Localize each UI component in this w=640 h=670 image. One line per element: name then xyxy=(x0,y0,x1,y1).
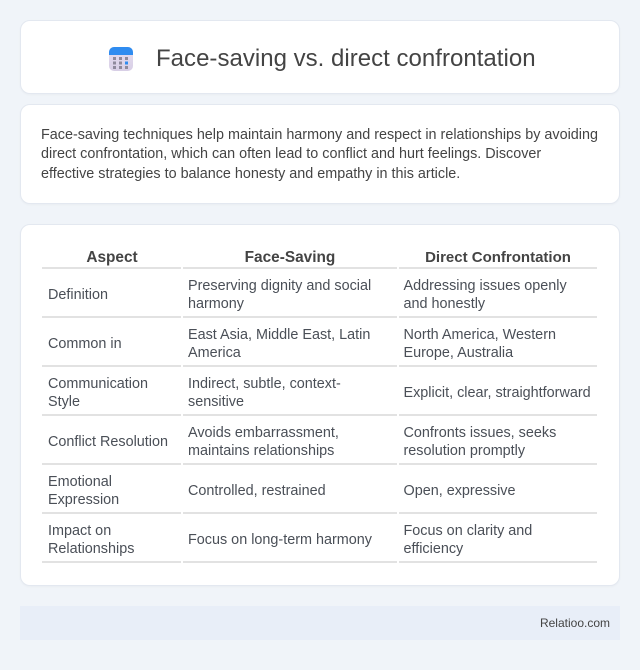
row: Impact on Relationships xyxy=(48,523,532,557)
row: Emotional Expression: Emotional xyxy=(48,474,112,490)
row: Common in: Common in xyxy=(48,336,122,352)
row: Communication Style: Communication xyxy=(48,376,148,392)
row: Definition: harmony xyxy=(188,296,244,312)
row: Emotional Expression: Expression xyxy=(48,492,119,508)
row: Common in: America xyxy=(188,345,241,361)
row: Conflict Resolution: resolution promptly xyxy=(404,443,525,459)
row: Common in xyxy=(48,327,556,361)
row: Common in: Europe, Australia xyxy=(404,345,513,361)
row: Common in: East Asia, Middle East, Latin xyxy=(188,327,370,343)
row: Communication Style xyxy=(48,376,591,410)
panel: title card xyxy=(20,20,620,94)
row: Conflict Resolution: Conflict Resolution xyxy=(48,434,168,450)
row: Definition xyxy=(48,278,567,312)
row: Impact on Relationships: Focus on clarity and xyxy=(404,523,532,539)
row: Definition: Preserving dignity and social xyxy=(188,278,371,294)
row: Definition: Definition xyxy=(48,287,108,303)
row: Emotional Expression xyxy=(48,474,515,508)
intro text xyxy=(41,126,598,182)
row: Impact on Relationships: Impact on xyxy=(48,523,111,539)
row: Emotional Expression: Open, expressive xyxy=(404,483,515,499)
header: Face-Saving: Face-Saving xyxy=(245,249,335,266)
intro text: direct confrontation, which can often lead to conflict and hurt feelings. Discover xyxy=(41,146,541,162)
row: Communication Style: sensitive xyxy=(188,394,244,410)
panel: intro text card xyxy=(20,104,620,204)
title: Face-saving vs. direct confrontation xyxy=(156,45,536,72)
footer xyxy=(20,606,620,640)
row: Definition: and honestly xyxy=(404,296,485,312)
row: Conflict Resolution: Confronts issues, seeks xyxy=(404,425,556,441)
header: Aspect: Aspect xyxy=(86,249,138,266)
row: Impact on Relationships: efficiency xyxy=(404,541,463,557)
row: Impact on Relationships: Focus on long-term harmony xyxy=(188,532,372,548)
footer text: Relatioo.com xyxy=(540,616,610,630)
row: Communication Style: Style xyxy=(48,394,80,410)
row: Impact on Relationships: Relationships xyxy=(48,541,134,557)
row: Conflict Resolution xyxy=(48,425,556,459)
row: Conflict Resolution: Avoids embarrassment, xyxy=(188,425,339,441)
header: Direct Confrontation: Direct Confrontation xyxy=(425,249,571,266)
row: Communication Style: Indirect, subtle, context- xyxy=(188,376,341,392)
row: Common in: North America, Western xyxy=(404,327,556,343)
intro text: Face-saving techniques help maintain harmony and respect in relationships by avoiding xyxy=(41,126,598,142)
icon: calendar xyxy=(109,47,133,71)
row: Definition: Addressing issues openly xyxy=(404,278,567,294)
row: Communication Style: Explicit, clear, straightforward xyxy=(404,385,591,401)
row: Emotional Expression: Controlled, restrained xyxy=(188,483,326,499)
row: Conflict Resolution: maintains relationships xyxy=(188,443,334,459)
intro text: effective strategies to balance honesty and empathy in this article. xyxy=(41,166,460,182)
